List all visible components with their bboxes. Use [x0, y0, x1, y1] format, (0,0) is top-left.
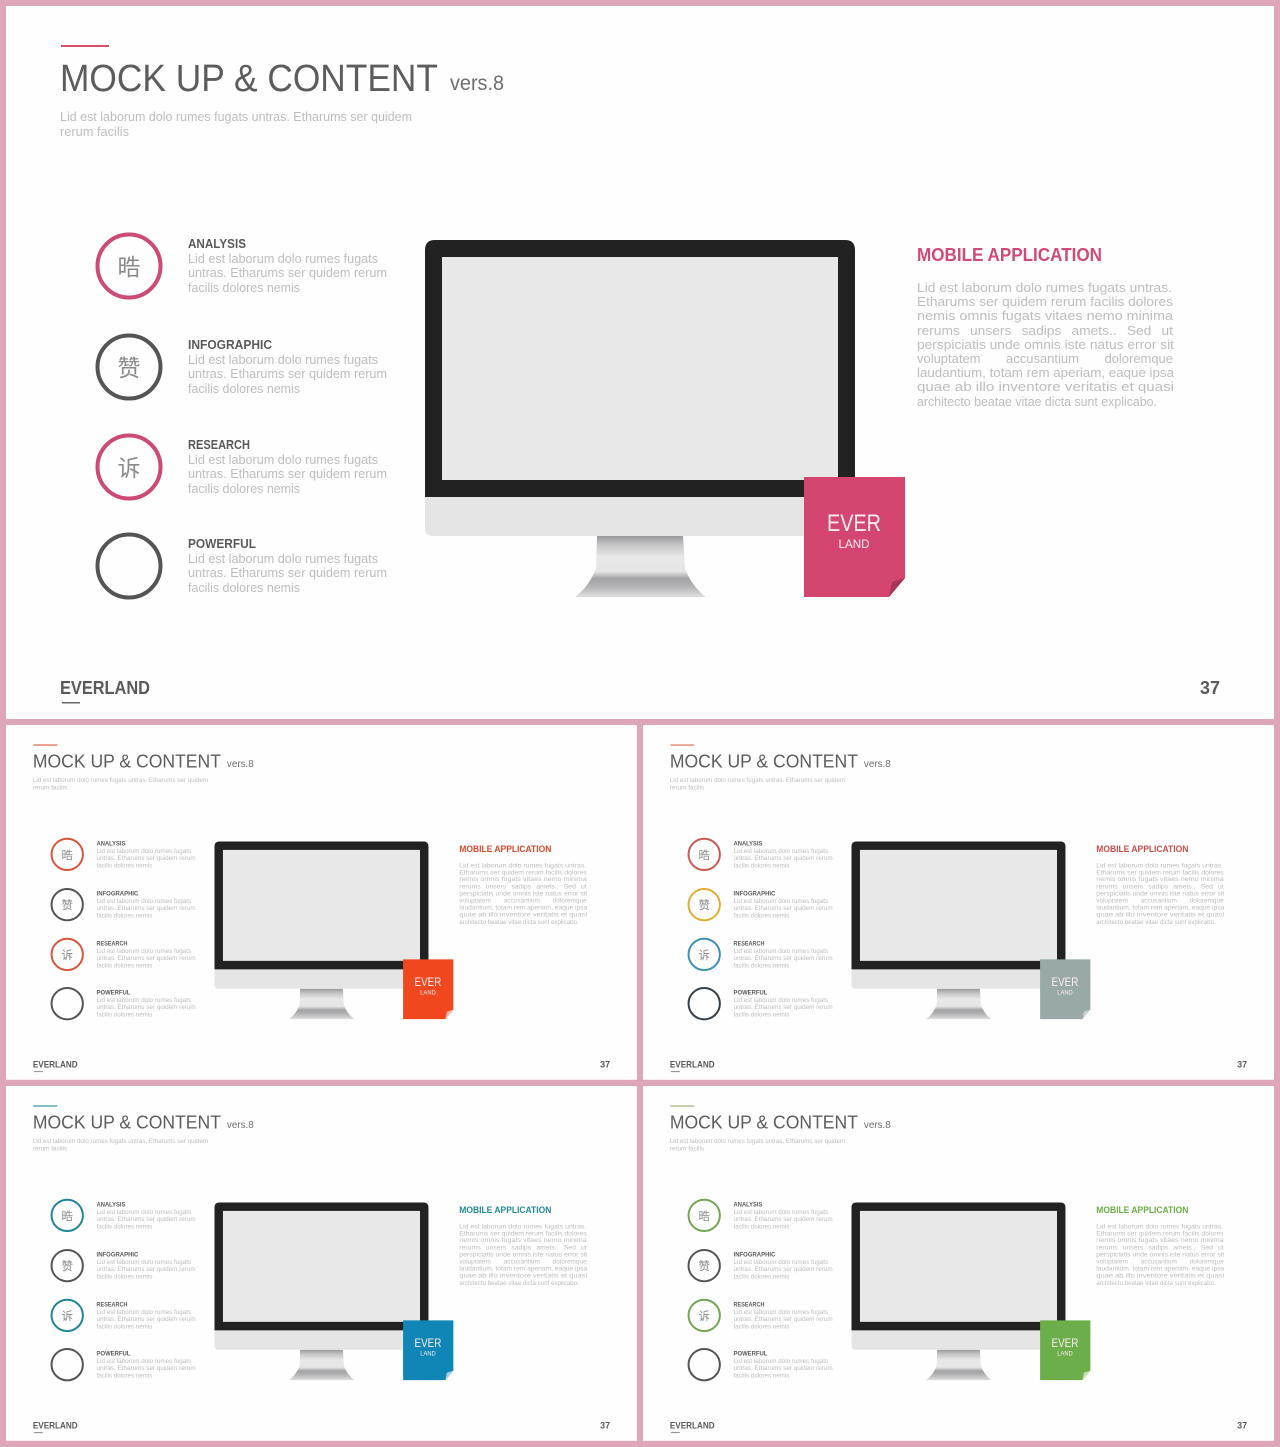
item: infographic: INFOGRAPHIC [97, 1252, 139, 1259]
page number: 37 [1237, 1420, 1247, 1430]
text block: description: Lid est laborum dolo rumes fugats untras. [459, 862, 586, 869]
badge: everland tag [1040, 1320, 1090, 1380]
item: analysis: untras. Etharums ser quidem rerum [97, 855, 196, 862]
text block: description: nemis omnis fugats vitaes nemo minima [917, 308, 1174, 323]
item: powerful [52, 988, 196, 1019]
item: analysis: ANALYSIS [734, 1201, 763, 1208]
item: infographic: untras. Etharums ser quidem rerum [734, 905, 833, 912]
badge: everland tag: EVER [415, 1336, 442, 1350]
item: analysis: Lid est laborum dolo rumes fugats [97, 848, 191, 855]
footer brand: EVERLAND [60, 678, 150, 698]
item: analysis: 晧 [698, 849, 710, 862]
text block: description: quae ab illo inventore veritatis et quasi [459, 912, 587, 919]
text block: description: rerums unsers sadips amets.. Sed ut [459, 884, 587, 891]
title: vers.8 [450, 72, 504, 95]
page number: 37 [600, 1059, 610, 1069]
footer brand: EVERLAND [33, 1059, 78, 1069]
title: MOCK UP & CONTENT [670, 1112, 858, 1133]
item: infographic: untras. Etharums ser quidem rerum [734, 1266, 833, 1273]
icon: desktop monitor [425, 240, 855, 597]
badge: everland tag [1040, 959, 1090, 1019]
accent line [33, 744, 57, 746]
item: powerful: Lid est laborum dolo rumes fugats [97, 1358, 191, 1365]
item: research: RESEARCH [188, 437, 250, 452]
heading: mobile application: MOBILE APPLICATION [917, 245, 1102, 265]
icon: desktop monitor [214, 841, 428, 1019]
item: analysis [689, 1200, 833, 1231]
page number: 37 [1200, 678, 1220, 698]
text block: description: Etharums ser quidem rerum facilis dolores [1096, 869, 1224, 876]
panel: main slide, pink [6, 6, 1274, 719]
text block: description: perspiciatis unde omnis iste natus error sit [917, 337, 1174, 352]
subtitle: Lid est laborum dolo rumes fugats untras. Etharums ser quidem [670, 1138, 845, 1145]
item: analysis: 晧 [118, 254, 140, 280]
subtitle: Lid est laborum dolo rumes fugats untras. Etharums ser quidem [60, 109, 412, 124]
item: analysis: 晧 [61, 849, 73, 862]
text block: description: architecto beatae vitae dicta sunt explicabo. [459, 1280, 579, 1287]
item: infographic [52, 889, 196, 920]
item: analysis: untras. Etharums ser quidem rerum [734, 855, 833, 862]
item: infographic: Lid est laborum dolo rumes fugats [188, 352, 378, 367]
item: infographic: facilis dolores nemis [734, 913, 789, 920]
panel: small slide, teal [6, 1086, 637, 1441]
item: research: facilis dolores nemis [188, 481, 300, 496]
badge: everland tag: LAND [420, 1352, 436, 1358]
text block: description: voluptatem accusantium doloremque [1096, 898, 1224, 905]
title: vers.8 [864, 1120, 891, 1131]
text block: description: quae ab illo inventore veritatis et quasi [1096, 912, 1224, 919]
item: research: Lid est laborum dolo rumes fugats [97, 1309, 191, 1316]
item: analysis [52, 839, 196, 870]
item: infographic: untras. Etharums ser quidem rerum [188, 366, 387, 381]
item: infographic: facilis dolores nemis [97, 1274, 152, 1281]
subtitle: rerum facilis [670, 1146, 704, 1153]
heading: mobile application: MOBILE APPLICATION [459, 1205, 551, 1215]
item: powerful: Lid est laborum dolo rumes fugats [188, 551, 378, 566]
item: powerful: facilis dolores nemis [734, 1012, 789, 1019]
item: analysis: Lid est laborum dolo rumes fugats [188, 251, 378, 266]
text block: description: Etharums ser quidem rerum facilis dolores [1096, 1230, 1224, 1237]
icon: desktop monitor [851, 1202, 1065, 1380]
item: analysis: Lid est laborum dolo rumes fugats [97, 1209, 191, 1216]
item: research: untras. Etharums ser quidem rerum [734, 955, 833, 962]
item: analysis: untras. Etharums ser quidem rerum [188, 265, 387, 280]
item: powerful: POWERFUL [188, 536, 256, 551]
item: research [52, 939, 196, 970]
text block: description: nemis omnis fugats vitaes nemo minima [459, 1237, 587, 1244]
item: infographic: Lid est laborum dolo rumes fugats [97, 1259, 191, 1266]
item: research: untras. Etharums ser quidem rerum [97, 955, 196, 962]
item: infographic: Lid est laborum dolo rumes fugats [734, 898, 828, 905]
text block: description: quae ab illo inventore veritatis et quasi [1096, 1273, 1224, 1280]
subtitle: Lid est laborum dolo rumes fugats untras. Etharums ser quidem [33, 777, 208, 784]
heading: mobile application: MOBILE APPLICATION [459, 844, 551, 854]
accent line [33, 1105, 57, 1107]
accent line [61, 45, 109, 47]
item: research: RESEARCH [97, 1301, 128, 1308]
item: infographic: INFOGRAPHIC [97, 891, 139, 898]
item: analysis: untras. Etharums ser quidem rerum [734, 1216, 833, 1223]
text block: description [917, 280, 1175, 409]
item: infographic: facilis dolores nemis [97, 913, 152, 920]
footer brand: EVERLAND [33, 1420, 78, 1430]
item: analysis: 晧 [698, 1210, 710, 1223]
title: MOCK UP & CONTENT [670, 751, 858, 772]
item: powerful [98, 534, 387, 598]
item: powerful: facilis dolores nemis [188, 580, 300, 595]
item: research: facilis dolores nemis [734, 962, 789, 969]
item: infographic: facilis dolores nemis [188, 381, 300, 396]
item: powerful: facilis dolores nemis [97, 1373, 152, 1380]
item: research [52, 1300, 196, 1331]
item: powerful [52, 1349, 196, 1380]
subtitle [670, 777, 845, 792]
text block: description: Etharums ser quidem rerum facilis dolores [459, 1230, 587, 1237]
item: infographic: facilis dolores nemis [734, 1274, 789, 1281]
item: research: Lid est laborum dolo rumes fugats [734, 1309, 828, 1316]
badge: everland tag [403, 959, 453, 1019]
text block: description: perspiciatis unde omnis iste natus error sit [459, 1252, 587, 1259]
item: analysis [52, 1200, 196, 1231]
item: research: facilis dolores nemis [97, 962, 152, 969]
text block: description: rerums unsers sadips amets.. Sed ut [459, 1245, 587, 1252]
item: analysis: ANALYSIS [97, 840, 126, 847]
text block: description: laudantium, totam rem aperiam, eaque ipsa [1096, 905, 1225, 912]
text block: description: Etharums ser quidem rerum facilis dolores [459, 869, 587, 876]
panel: small slide, multicolour grey [643, 725, 1274, 1080]
item: powerful [689, 988, 833, 1019]
item: research [689, 1300, 833, 1331]
badge: everland tag: EVER [415, 975, 442, 989]
item: infographic: 赞 [61, 899, 73, 912]
item: research [689, 939, 833, 970]
badge: everland tag: LAND [838, 537, 870, 551]
subtitle: Lid est laborum dolo rumes fugats untras. Etharums ser quidem [33, 1138, 208, 1145]
item: research: untras. Etharums ser quidem rerum [188, 466, 387, 481]
text block: description [459, 862, 588, 926]
item: analysis: Lid est laborum dolo rumes fugats [734, 848, 828, 855]
subtitle: rerum facilis [670, 785, 704, 792]
text block: description: architecto beatae vitae dicta sunt explicabo. [917, 394, 1157, 409]
text block: description: perspiciatis unde omnis iste natus error sit [459, 891, 587, 898]
badge: everland tag [403, 1320, 453, 1380]
item: powerful: facilis dolores nemis [734, 1373, 789, 1380]
text block: description: rerums unsers sadips amets.. Sed ut [1096, 884, 1224, 891]
text block: description: Lid est laborum dolo rumes fugats untras. [917, 280, 1172, 295]
item: research: 诉 [698, 949, 710, 962]
text block: description: quae ab illo inventore veritatis et quasi [459, 1273, 587, 1280]
item: infographic: Lid est laborum dolo rumes fugats [97, 898, 191, 905]
title: vers.8 [227, 1120, 254, 1131]
text block: description: Etharums ser quidem rerum facilis dolores [917, 294, 1174, 309]
title: MOCK UP & CONTENT [33, 1112, 221, 1133]
text block: description: Lid est laborum dolo rumes fugats untras. [459, 1223, 586, 1230]
text block: description: Lid est laborum dolo rumes fugats untras. [1096, 862, 1223, 869]
item: research: 诉 [698, 1310, 710, 1323]
badge: everland tag: LAND [420, 991, 436, 997]
badge: everland tag: LAND [1057, 991, 1073, 997]
text block: description: voluptatem accusantium doloremque [1096, 1259, 1224, 1266]
item: analysis: ANALYSIS [97, 1201, 126, 1208]
title: vers.8 [864, 759, 891, 770]
item: infographic: 赞 [61, 1260, 73, 1273]
item: analysis [689, 839, 833, 870]
item: analysis: facilis dolores nemis [97, 1223, 152, 1230]
subtitle [33, 777, 208, 792]
item: research: Lid est laborum dolo rumes fugats [188, 452, 378, 467]
item: analysis: untras. Etharums ser quidem rerum [97, 1216, 196, 1223]
item: infographic [689, 1250, 833, 1281]
item: analysis: facilis dolores nemis [734, 1223, 789, 1230]
title: MOCK UP & CONTENT [60, 58, 438, 100]
subtitle: Lid est laborum dolo rumes fugats untras. Etharums ser quidem [670, 777, 845, 784]
subtitle: rerum facilis [33, 1146, 67, 1153]
item: research [98, 436, 387, 498]
item: analysis: ANALYSIS [188, 236, 246, 251]
icon: desktop monitor [214, 1202, 428, 1380]
item: research: untras. Etharums ser quidem rerum [734, 1316, 833, 1323]
text block: description: Lid est laborum dolo rumes fugats untras. [1096, 1223, 1223, 1230]
item: infographic: INFOGRAPHIC [734, 1252, 776, 1259]
text block: description: rerums unsers sadips amets.. Sed ut [917, 323, 1173, 338]
item: powerful: Lid est laborum dolo rumes fugats [734, 997, 828, 1004]
heading: mobile application: MOBILE APPLICATION [1096, 844, 1188, 854]
text block: description: architecto beatae vitae dicta sunt explicabo. [1096, 1280, 1216, 1287]
text block: description: voluptatem accusantium doloremque [459, 1259, 587, 1266]
item: powerful: untras. Etharums ser quidem rerum [734, 1365, 833, 1372]
item: research: RESEARCH [97, 940, 128, 947]
text block: description: laudantium, totam rem aperiam, eaque ipsa [459, 1266, 588, 1273]
item: research: RESEARCH [734, 1301, 765, 1308]
item: analysis: Lid est laborum dolo rumes fugats [734, 1209, 828, 1216]
text block: description [1096, 1223, 1225, 1287]
item: research: Lid est laborum dolo rumes fugats [734, 948, 828, 955]
item: powerful: untras. Etharums ser quidem rerum [734, 1004, 833, 1011]
item: powerful: Lid est laborum dolo rumes fugats [97, 997, 191, 1004]
badge: everland tag: LAND [1057, 1352, 1073, 1358]
item: analysis: facilis dolores nemis [734, 862, 789, 869]
item: infographic [98, 336, 387, 398]
item: research: Lid est laborum dolo rumes fugats [97, 948, 191, 955]
footer brand: EVERLAND [670, 1420, 715, 1430]
item: infographic: 赞 [698, 1260, 710, 1273]
text block: description: perspiciatis unde omnis iste natus error sit [1096, 891, 1224, 898]
subtitle [60, 109, 412, 139]
item: powerful: Lid est laborum dolo rumes fugats [734, 1358, 828, 1365]
item: infographic: 赞 [118, 355, 140, 381]
text block: description: voluptatem accusantium doloremque [459, 898, 587, 905]
text block: description [1096, 862, 1225, 926]
item: powerful: POWERFUL [734, 990, 767, 997]
item: infographic: untras. Etharums ser quidem rerum [97, 905, 196, 912]
item: infographic: Lid est laborum dolo rumes fugats [734, 1259, 828, 1266]
text block: description: voluptatem accusantium doloremque [917, 351, 1173, 366]
accent line [670, 744, 694, 746]
text block: description: rerums unsers sadips amets.. Sed ut [1096, 1245, 1224, 1252]
panel: small slide, green [643, 1086, 1274, 1441]
accent line [670, 1105, 694, 1107]
item: analysis [98, 234, 387, 298]
badge: everland tag: EVER [1052, 975, 1079, 989]
text block: description: laudantium, totam rem aperiam, eaque ipsa [917, 365, 1175, 380]
item: analysis: 晧 [61, 1210, 73, 1223]
item: research: untras. Etharums ser quidem rerum [97, 1316, 196, 1323]
item: research: facilis dolores nemis [734, 1323, 789, 1330]
footer brand: EVERLAND [670, 1059, 715, 1069]
item: infographic: INFOGRAPHIC [734, 891, 776, 898]
badge: everland tag [804, 477, 905, 597]
item: research: 诉 [61, 1310, 73, 1323]
text block: description: quae ab illo inventore veritatis et quasi [917, 379, 1174, 394]
item: powerful [689, 1349, 833, 1380]
item: powerful: POWERFUL [97, 990, 130, 997]
subtitle: rerum facilis [33, 785, 67, 792]
item: research: 诉 [61, 949, 73, 962]
subtitle [670, 1138, 845, 1153]
item: powerful: untras. Etharums ser quidem rerum [188, 565, 387, 580]
item: infographic: INFOGRAPHIC [188, 337, 273, 352]
item: powerful: POWERFUL [97, 1351, 130, 1358]
title: MOCK UP & CONTENT [33, 751, 221, 772]
item: powerful: untras. Etharums ser quidem rerum [97, 1004, 196, 1011]
heading: mobile application: MOBILE APPLICATION [1096, 1205, 1188, 1215]
item: analysis: ANALYSIS [734, 840, 763, 847]
text block: description: architecto beatae vitae dicta sunt explicabo. [459, 919, 579, 926]
item: infographic [689, 889, 833, 920]
badge: everland tag: EVER [1052, 1336, 1079, 1350]
page number: 37 [1237, 1059, 1247, 1069]
item: infographic: untras. Etharums ser quidem rerum [97, 1266, 196, 1273]
subtitle: rerum facilis [60, 124, 129, 139]
item: powerful: facilis dolores nemis [97, 1012, 152, 1019]
item: powerful: untras. Etharums ser quidem rerum [97, 1365, 196, 1372]
text block: description: nemis omnis fugats vitaes nemo minima [1096, 1237, 1224, 1244]
item: research: facilis dolores nemis [97, 1323, 152, 1330]
title: vers.8 [227, 759, 254, 770]
text block: description: laudantium, totam rem aperiam, eaque ipsa [459, 905, 588, 912]
item: analysis: facilis dolores nemis [97, 862, 152, 869]
panel: small slide, red [6, 725, 637, 1080]
item: infographic: 赞 [698, 899, 710, 912]
item: infographic [52, 1250, 196, 1281]
text block: description: nemis omnis fugats vitaes nemo minima [459, 876, 587, 883]
subtitle [33, 1138, 208, 1153]
page number: 37 [600, 1420, 610, 1430]
item: research: 诉 [118, 455, 140, 481]
text block: description: laudantium, totam rem aperiam, eaque ipsa [1096, 1266, 1225, 1273]
item: research: RESEARCH [734, 940, 765, 947]
text block: description: perspiciatis unde omnis iste natus error sit [1096, 1252, 1224, 1259]
badge: everland tag: EVER [827, 510, 881, 537]
icon: desktop monitor [851, 841, 1065, 1019]
item: powerful: POWERFUL [734, 1351, 767, 1358]
text block: description [459, 1223, 588, 1287]
item: analysis: facilis dolores nemis [188, 280, 300, 295]
text block: description: nemis omnis fugats vitaes nemo minima [1096, 876, 1224, 883]
text block: description: architecto beatae vitae dicta sunt explicabo. [1096, 919, 1216, 926]
